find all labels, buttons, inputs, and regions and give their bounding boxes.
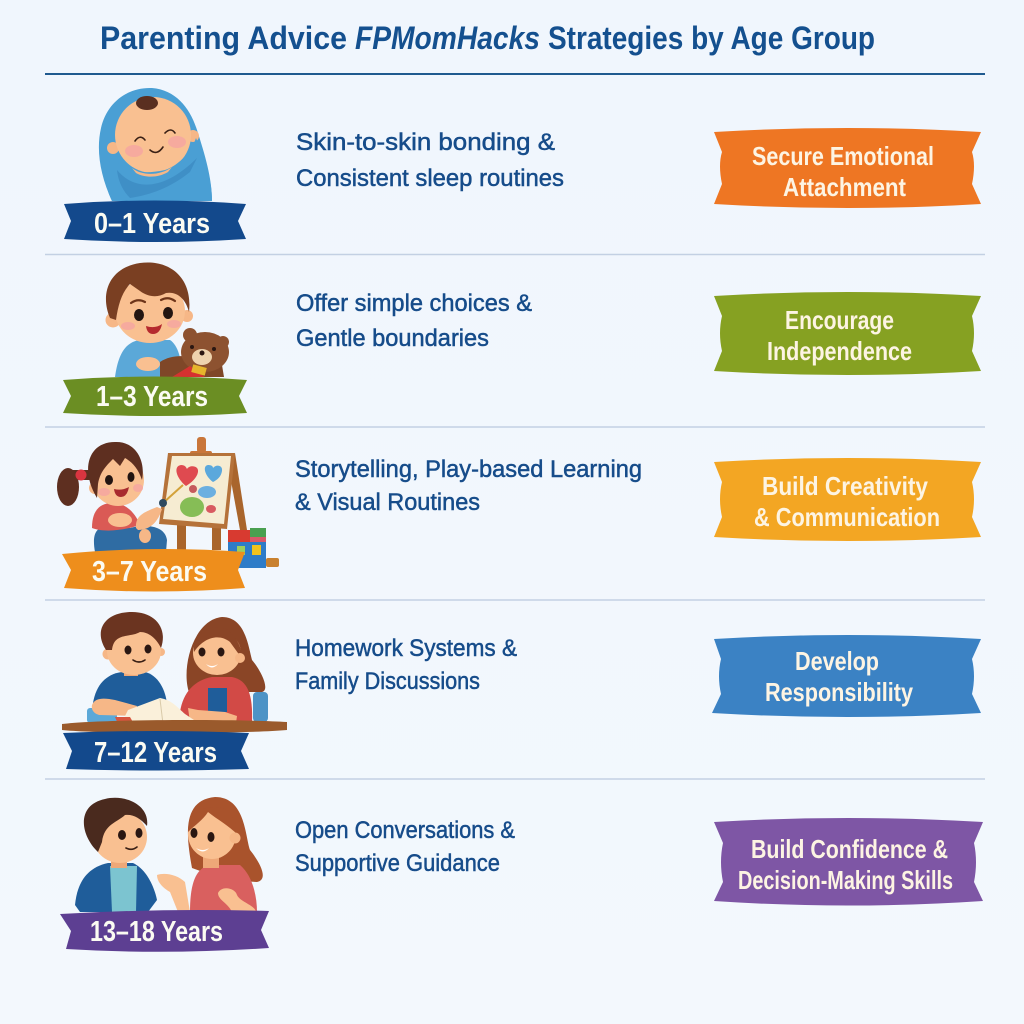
age ribbon: 13-18 years: 13–18 Years bbox=[90, 916, 223, 948]
outcome ribbon: purple: Build Confidence & bbox=[751, 834, 948, 864]
strategy text: Gentle boundaries bbox=[296, 325, 489, 352]
outcome ribbon: orange bbox=[714, 128, 981, 208]
strategy text bbox=[295, 635, 517, 695]
title: FPMomHacks bbox=[355, 20, 540, 56]
icon: teen talking with parent bbox=[75, 797, 263, 912]
icon: girl painting at easel bbox=[57, 437, 279, 568]
age ribbon: 0-1 years: 0–1 Years bbox=[94, 208, 210, 240]
title: Strategies by Age Group bbox=[548, 20, 875, 56]
outcome ribbon: blue: Responsibility bbox=[765, 677, 913, 707]
strategy text: Supportive Guidance bbox=[295, 850, 500, 877]
age ribbon: 7-12 years bbox=[63, 731, 249, 770]
panel: 7-12 years bbox=[62, 612, 981, 770]
age ribbon: 3-7 years bbox=[62, 549, 245, 592]
age ribbon: 3-7 years: 3–7 Years bbox=[92, 556, 207, 588]
age ribbon: 1-3 years bbox=[63, 376, 247, 416]
age ribbon: 1-3 years: 1–3 Years bbox=[96, 381, 208, 413]
strategy text: Consistent sleep routines bbox=[296, 165, 564, 192]
title: Parenting Advice bbox=[100, 20, 347, 56]
panel: 0-1 years bbox=[64, 88, 981, 242]
title bbox=[100, 20, 875, 56]
panel: 1-3 years bbox=[63, 262, 981, 416]
outcome ribbon: blue: Develop bbox=[795, 646, 879, 676]
age ribbon: 7-12 years: 7–12 Years bbox=[94, 737, 217, 769]
outcome ribbon: purple bbox=[714, 818, 983, 906]
outcome ribbon: blue bbox=[712, 635, 981, 717]
outcome ribbon: green bbox=[714, 292, 981, 375]
panel: 3-7 years bbox=[57, 437, 981, 592]
outcome ribbon: yellow: & Communication bbox=[754, 502, 940, 532]
strategy text: & Visual Routines bbox=[295, 489, 480, 516]
outcome ribbon: purple: Decision-Making Skills bbox=[738, 865, 953, 895]
strategy text: Storytelling, Play-based Learning bbox=[295, 456, 642, 483]
icon: siblings reading at table bbox=[62, 612, 287, 733]
outcome ribbon: yellow bbox=[714, 458, 981, 541]
icon: swaddled baby bbox=[99, 88, 212, 201]
strategy text bbox=[296, 129, 564, 192]
strategy text: Homework Systems & bbox=[295, 635, 517, 662]
strategy text bbox=[295, 456, 642, 516]
strategy text: Family Discussions bbox=[295, 668, 480, 695]
age ribbon: 0-1 years bbox=[64, 200, 246, 242]
outcome ribbon: orange: Secure Emotional bbox=[752, 141, 934, 171]
outcome ribbon: green: Independence bbox=[767, 336, 912, 366]
outcome ribbon: yellow: Build Creativity bbox=[762, 471, 928, 501]
icon: toddler with teddy bear bbox=[106, 262, 229, 377]
panel: 13-18 years bbox=[60, 797, 983, 952]
outcome ribbon: orange: Attachment bbox=[783, 172, 906, 202]
strategy text: Skin-to-skin bonding & bbox=[296, 129, 555, 156]
age ribbon: 13-18 years bbox=[60, 910, 269, 952]
strategy text bbox=[296, 290, 532, 352]
strategy text: Offer simple choices & bbox=[296, 290, 532, 317]
strategy text: Open Conversations & bbox=[295, 817, 515, 844]
outcome ribbon: green: Encourage bbox=[785, 305, 894, 335]
strategy text bbox=[295, 817, 515, 877]
